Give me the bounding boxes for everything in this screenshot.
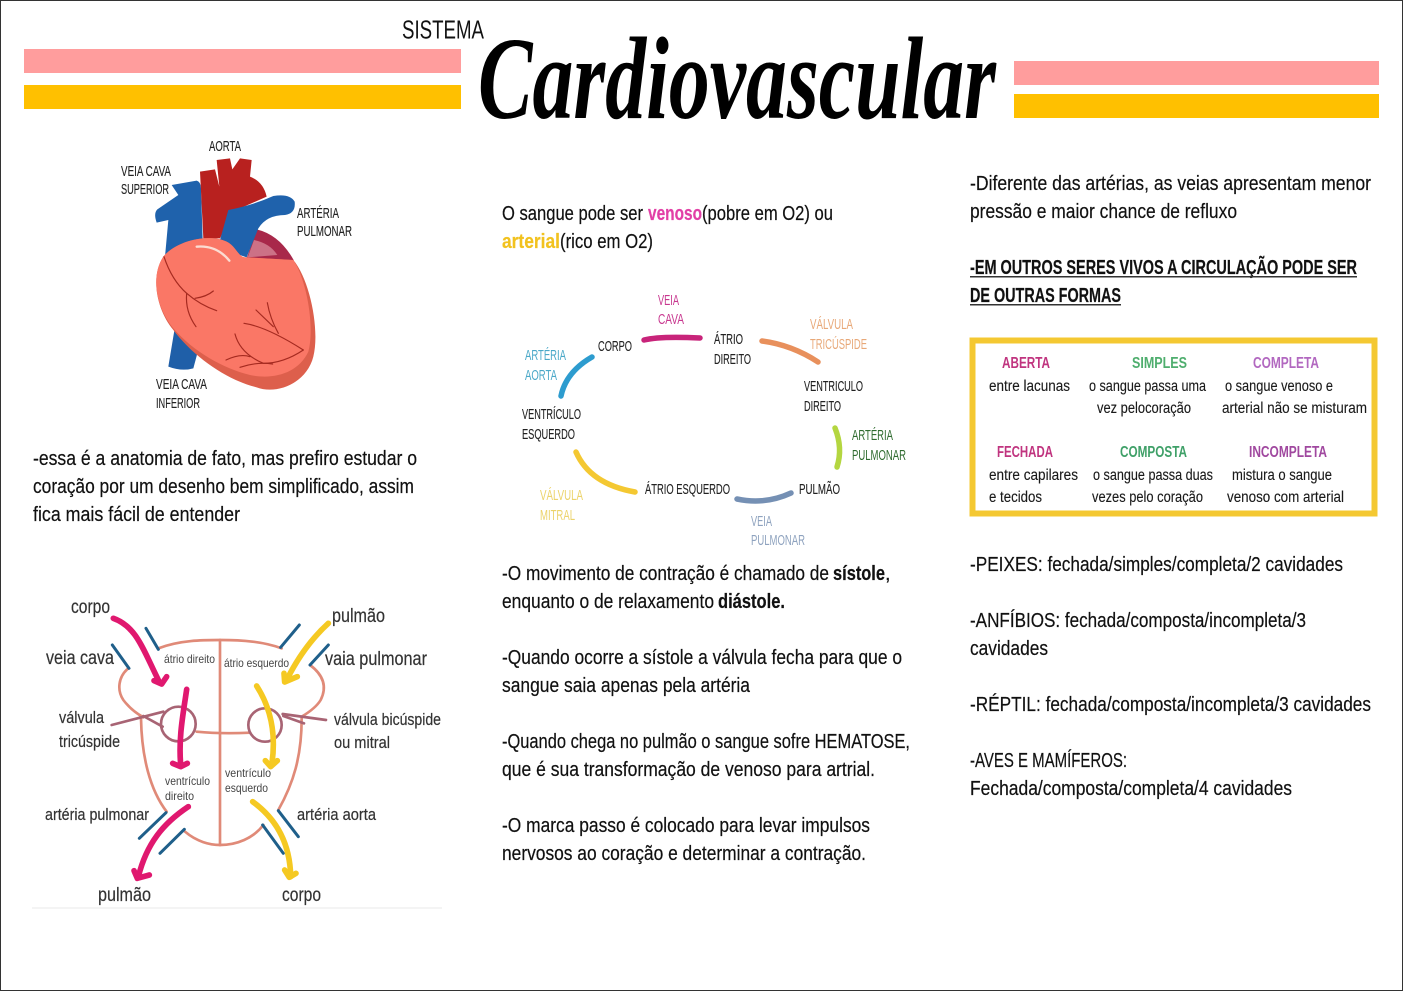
type descriptions: entre capilares xyxy=(989,467,1078,484)
cycle labels: VÁLVULA xyxy=(540,487,583,504)
heading: other circulation forms xyxy=(970,256,1357,307)
text block: veins note: pressão e maior chance de refluxo xyxy=(970,201,1237,223)
text block: heart function notes: -Quando ocorre a sístole a válvula fecha para que o xyxy=(502,647,902,669)
text block: blood types: O sangue pode ser xyxy=(502,203,643,225)
diagram drawing xyxy=(112,618,328,878)
heart labels: VEIA CAVA xyxy=(156,377,207,393)
heart anatomy illustration xyxy=(121,139,352,412)
cycle labels: VEIA xyxy=(658,293,679,309)
heading: other circulation forms: DE OUTRAS FORMAS xyxy=(970,285,1121,307)
text block: blood types xyxy=(502,203,833,253)
text block: heart function notes: sístole xyxy=(833,563,885,585)
icon: heart xyxy=(155,158,315,390)
cycle labels: VENTRÍCULO xyxy=(522,406,581,423)
type descriptions: venoso com arterial xyxy=(1227,489,1344,506)
type headings: INCOMPLETA xyxy=(1249,444,1327,461)
heart labels xyxy=(121,139,352,412)
heart labels: VEIA CAVA xyxy=(121,164,171,180)
text block: blood types: venoso xyxy=(648,203,702,225)
text block: heart function notes: diástole. xyxy=(718,591,785,613)
simplified heart diagram xyxy=(32,597,442,909)
diagram outer labels: veia cava xyxy=(46,648,114,669)
cycle labels: CORPO xyxy=(598,339,632,355)
text block: blood types: (rico em O2) xyxy=(560,231,653,253)
text block: anatomy note: -essa é a anatomia de fato, mas prefiro estudar o xyxy=(33,448,417,470)
diagram outer labels: pulmão xyxy=(332,606,385,627)
type headings: SIMPLES xyxy=(1132,355,1187,372)
diagram outer labels: corpo xyxy=(71,597,110,618)
cycle labels xyxy=(522,293,906,549)
heart labels: PULMONAR xyxy=(297,224,352,240)
type descriptions: arterial não se misturam xyxy=(1222,400,1367,417)
type headings: FECHADA xyxy=(997,444,1053,461)
diagram outer labels: válvula xyxy=(59,708,104,727)
cycle labels: VENTRICULO xyxy=(804,379,863,395)
heart labels: AORTA xyxy=(209,139,241,155)
text block: blood types: arterial xyxy=(502,231,560,253)
type descriptions: mistura o sangue xyxy=(1232,467,1332,484)
right header bars xyxy=(1014,61,1379,118)
cycle labels: MITRAL xyxy=(540,508,575,524)
cycle labels: CAVA xyxy=(658,312,684,328)
text block: heart function notes xyxy=(502,563,910,865)
diagram outer labels: tricúspide xyxy=(59,732,120,751)
text block: anatomy note: fica mais fácil de entender xyxy=(33,504,240,526)
title xyxy=(402,13,997,144)
diagram chamber labels: esquerdo xyxy=(225,781,268,795)
text block: heart function notes: -O movimento de contração é chamado de xyxy=(502,563,829,585)
type descriptions: o sangue passa duas xyxy=(1093,467,1213,484)
title: Cardiovascular xyxy=(478,13,997,144)
type headings xyxy=(997,355,1327,461)
diagram outer labels: artéria pulmonar xyxy=(45,805,149,824)
heart labels: ARTÉRIA xyxy=(297,205,339,222)
diagram chamber labels: átrio esquerdo xyxy=(224,656,289,670)
text block: heart function notes: -O marca passo é colocado para levar impulsos xyxy=(502,815,870,837)
text block: heart function notes: enquanto o de relaxamento xyxy=(502,591,714,613)
text block: animal groups: -ANFÍBIOS: fechada/composta/incompleta/3 xyxy=(970,609,1306,632)
diagram outer labels: pulmão xyxy=(98,885,151,906)
diagram outer labels: vaia pulmonar xyxy=(325,649,428,670)
type descriptions xyxy=(989,378,1367,506)
panel: circulation types xyxy=(972,340,1374,514)
cycle labels: PULMONAR xyxy=(751,533,805,549)
diagram outer labels xyxy=(45,597,441,906)
diagram outer labels: corpo xyxy=(282,885,321,906)
text block: heart function notes: nervosos ao coração e determinar a contração. xyxy=(502,843,866,865)
cycle labels: ARTÉRIA xyxy=(852,427,893,444)
type descriptions: o sangue passa uma xyxy=(1089,378,1206,395)
cycle labels: ARTÉRIA xyxy=(525,347,566,364)
title: SISTEMA xyxy=(402,14,484,44)
type descriptions: vezes pelo coração xyxy=(1092,489,1203,506)
diagram outer labels: ou mitral xyxy=(334,733,390,752)
cycle labels: AORTA xyxy=(525,368,557,384)
type headings: ABERTA xyxy=(1002,355,1050,372)
diagram outer labels: artéria aorta xyxy=(297,805,376,824)
cycle labels: DIREITO xyxy=(714,352,751,368)
cycle labels: TRICÚSPIDE xyxy=(810,336,867,353)
diagram chamber labels: direito xyxy=(165,789,194,803)
cycle labels: PULMONAR xyxy=(852,448,906,464)
diagram outer labels: válvula bicúspide xyxy=(334,710,441,729)
cycle labels: DIREITO xyxy=(804,399,841,415)
cycle strokes xyxy=(561,337,840,501)
cycle labels: VÁLVULA xyxy=(810,316,853,333)
text block: animal groups: Fechada/composta/completa/4 cavidades xyxy=(970,778,1292,800)
type headings: COMPLETA xyxy=(1253,355,1319,372)
cycle labels: VEIA xyxy=(751,514,772,530)
text block: veins note xyxy=(970,173,1371,223)
cycle labels: PULMÃO xyxy=(799,481,840,498)
cycle labels: ESQUERDO xyxy=(522,427,575,443)
cycle labels: ÁTRIO xyxy=(714,331,743,348)
heart labels: INFERIOR xyxy=(156,396,200,412)
text block: animal groups: -PEIXES: fechada/simples/completa/2 cavidades xyxy=(970,554,1343,576)
diagram chamber labels: ventrículo xyxy=(225,766,271,780)
text block: animal groups: -AVES E MAMÍFEROS: xyxy=(970,749,1127,772)
diagram chamber labels: átrio direito xyxy=(164,652,215,666)
type descriptions: e tecidos xyxy=(989,489,1042,506)
heart labels: SUPERIOR xyxy=(121,182,169,198)
circulation cycle chart xyxy=(522,293,906,549)
text block: heart function notes: , xyxy=(885,563,891,585)
text block: heart function notes: que é sua transformação de venoso para artrial. xyxy=(502,759,875,781)
type descriptions: entre lacunas xyxy=(989,378,1070,395)
text block: heart function notes: -Quando chega no pulmão o sangue sofre HEMATOSE, xyxy=(502,731,910,753)
type descriptions: vez pelocoração xyxy=(1097,400,1191,417)
type descriptions: o sangue venoso e xyxy=(1225,378,1333,395)
text block: anatomy note: coração por um desenho bem simplificado, assim xyxy=(33,476,414,498)
text block: anatomy note xyxy=(33,448,417,526)
text block: animal groups: cavidades xyxy=(970,638,1048,660)
cycle labels: ÁTRIO ESQUERDO xyxy=(645,481,730,498)
type headings: COMPOSTA xyxy=(1120,444,1187,461)
diagram chamber labels: ventrículo xyxy=(165,774,210,788)
text block: animal groups xyxy=(970,554,1371,800)
text block: heart function notes: sangue saia apenas pela artéria xyxy=(502,675,751,697)
diagram chamber labels xyxy=(164,652,289,803)
text block: blood types: (pobre em O2) ou xyxy=(702,203,833,225)
left header bars xyxy=(24,49,461,109)
